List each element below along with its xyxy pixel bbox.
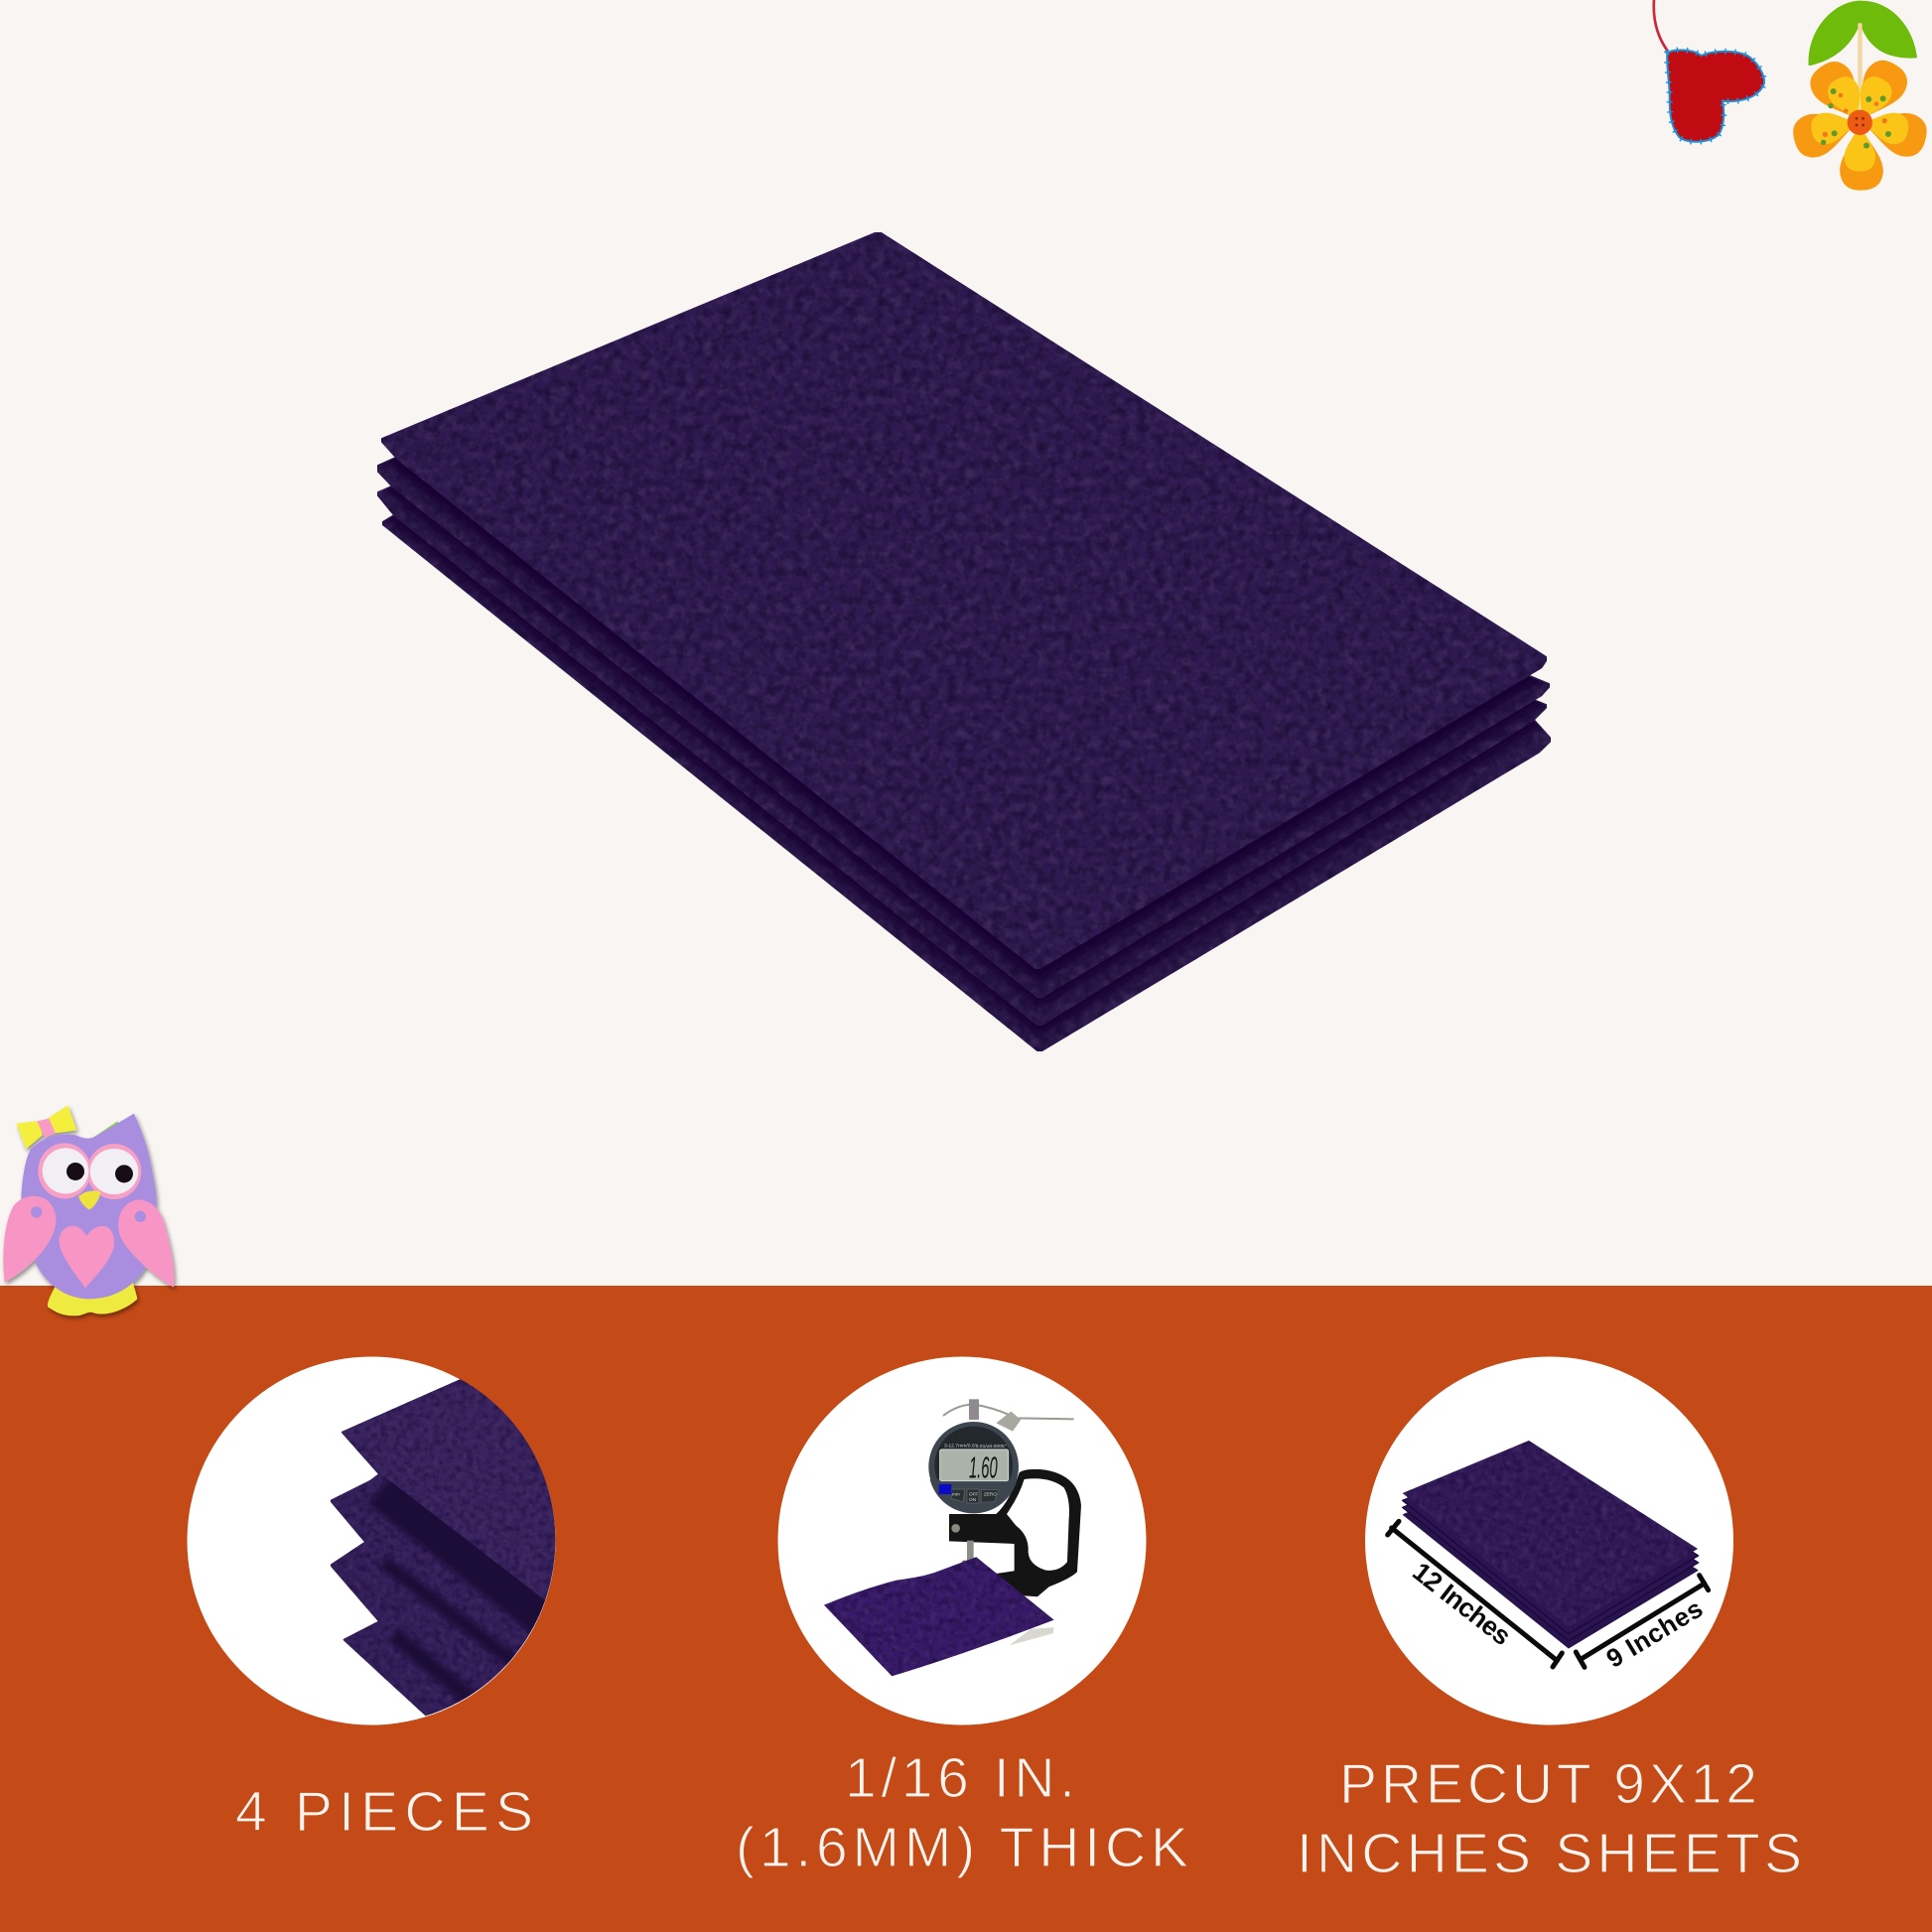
gauge lever xyxy=(943,1405,1074,1419)
heart body xyxy=(1667,50,1764,142)
panel: thickness xyxy=(736,1356,1188,1879)
close-up of sheet edges xyxy=(331,1380,556,1716)
panel: dimensions xyxy=(1297,1356,1802,1885)
thickness gauge and felt: 0.01/±0.0005" xyxy=(976,1444,1007,1449)
9 inches label: 9 Inches xyxy=(1601,1593,1708,1674)
thickness gauge and felt: 1.60 xyxy=(969,1451,998,1485)
white circle xyxy=(1365,1356,1733,1725)
shadow under sheet 2 xyxy=(383,487,1547,1011)
yellow petals xyxy=(1809,72,1910,172)
frame screw xyxy=(951,1524,960,1533)
heart stitches xyxy=(1667,50,1764,142)
top sheet xyxy=(381,232,1547,969)
wing buttons xyxy=(31,1206,42,1218)
panel: 4 pieces xyxy=(187,1356,556,1831)
main image: stack of four purple felt sheets xyxy=(377,232,1551,1051)
dark gaps xyxy=(380,1489,543,1701)
small felt stack with measurements xyxy=(1388,1441,1709,1674)
thickness gauge and felt: ON xyxy=(969,1497,976,1502)
decoration: felt owl xyxy=(3,1105,174,1315)
background xyxy=(0,0,1932,1286)
blue button xyxy=(939,1484,951,1494)
label: sheet size line 2: INCHES SHEETS xyxy=(1297,1822,1802,1885)
beak xyxy=(78,1190,101,1210)
thickness gauge and felt xyxy=(824,1399,1081,1676)
white circle xyxy=(778,1356,1146,1725)
thickness gauge and felt: OFF xyxy=(969,1492,978,1497)
heart string xyxy=(1654,0,1668,52)
label: sheet size line 1: PRECUT 9X12 xyxy=(1339,1752,1757,1816)
gauge top pin xyxy=(969,1399,979,1420)
sheet 4 (bottom) xyxy=(382,387,1551,1051)
leaves xyxy=(1809,1,1917,66)
orange petals xyxy=(1789,54,1931,191)
green tag xyxy=(94,1121,119,1139)
layered edges xyxy=(331,1380,556,1716)
gauge frame xyxy=(949,1469,1081,1596)
decoration: felt flower with leaves xyxy=(1789,1,1931,191)
eyes xyxy=(38,1143,91,1198)
12 inches label: 12 Inches xyxy=(1407,1557,1517,1651)
label: 4 pieces: 4 PIECES xyxy=(235,1780,533,1844)
owl body xyxy=(21,1114,157,1299)
9 inches bracket xyxy=(1576,1576,1709,1667)
owl feet xyxy=(48,1281,137,1315)
petal print dots xyxy=(1821,88,1891,149)
decoration: felt heart with string xyxy=(1654,0,1764,142)
sheet 2 xyxy=(377,328,1550,998)
orange band xyxy=(0,1286,1932,1932)
button xyxy=(1848,110,1872,135)
gauge buttons xyxy=(951,1489,999,1503)
12 inches bracket xyxy=(1388,1521,1562,1667)
thickness gauge and felt: mm xyxy=(952,1492,960,1497)
white circle xyxy=(187,1356,556,1725)
label: thickness line 2: (1.6MM) THICK xyxy=(736,1816,1188,1879)
wings xyxy=(3,1196,56,1283)
thickness gauge and felt: ZERO xyxy=(984,1492,997,1497)
bow xyxy=(17,1105,76,1149)
top sheet surface xyxy=(386,1380,556,1600)
sheet 3 xyxy=(377,357,1547,1026)
purple felt square xyxy=(824,1557,1054,1676)
gauge scale text: 3-12.7mm/0.5" xyxy=(944,1443,977,1449)
stick xyxy=(1858,23,1863,96)
spindle xyxy=(967,1541,974,1562)
shadow under sheet 3 xyxy=(386,516,1538,1038)
gauge screen xyxy=(940,1449,1009,1481)
label: thickness line 1: 1/16 IN. xyxy=(845,1746,1075,1810)
gauge dial xyxy=(928,1422,1019,1512)
shadow under top sheet xyxy=(385,459,1543,985)
paper shadow xyxy=(1010,1627,1054,1645)
small stack xyxy=(1403,1441,1699,1648)
owl heart xyxy=(59,1226,114,1288)
